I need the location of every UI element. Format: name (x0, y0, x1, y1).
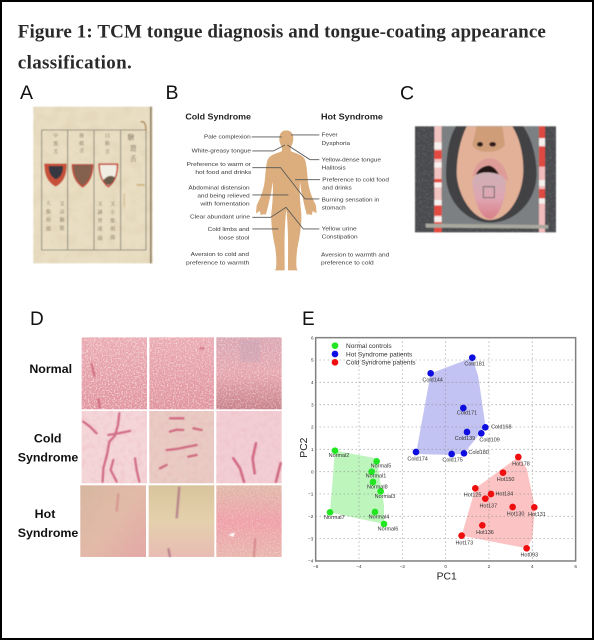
bottom ruler (426, 224, 548, 229)
hot point labels: Hot125 (464, 492, 481, 498)
cold points (413, 354, 489, 457)
title: Figure 1: TCM tongue diagnosis and tongue-coating appearance (18, 21, 546, 42)
y axis tick labels: −3 (308, 536, 314, 541)
panel label B: B (166, 82, 179, 104)
face (457, 126, 523, 220)
vertical caption characters: 柴 (110, 217, 115, 224)
hot point labels: Hot130 (507, 512, 524, 518)
cold point labels: Cold144 (422, 377, 443, 383)
vertical caption characters: 中 (53, 132, 58, 139)
vertical caption characters: 瘟 (79, 140, 84, 147)
legend: Cold Syndrome patients (346, 360, 416, 367)
vertical caption characters: 湯 (97, 235, 102, 242)
leader lines (252, 135, 320, 229)
hot syndrome symptoms (321, 133, 389, 267)
vertical caption characters: 又 (60, 202, 65, 208)
vertical caption characters: 胃 (97, 217, 102, 224)
vertical caption characters: 湯 (110, 234, 115, 241)
hot syndrome symptoms: Halitosis (322, 165, 346, 171)
row label: Cold Syndrome: Syndrome (18, 451, 78, 465)
y axis title: PC2 (299, 437, 310, 458)
cold point labels: Cold171 (457, 411, 477, 417)
legend: Normal controls (346, 343, 392, 350)
hot syndrome symptoms: stomach (322, 205, 346, 211)
normal cluster hull (330, 451, 384, 524)
cold point labels: Cold174 (407, 456, 428, 462)
cold point labels: Cold180 (468, 450, 489, 456)
row label: Hot Syndrome: Syndrome (18, 526, 78, 540)
panel label D: D (30, 309, 44, 330)
panel label E: E (302, 309, 315, 330)
hot point labels: Hot150 (497, 477, 514, 483)
y axis tick labels: 2 (311, 425, 314, 430)
tongue drawing: brown coating (72, 164, 93, 188)
cold syndrome symptoms: loose stool (219, 235, 249, 241)
panel D: tongue coating micrographs (18, 309, 282, 557)
tongue drawing: black coating (44, 164, 67, 187)
x axis tick labels: 6 (574, 564, 577, 569)
cold point labels (407, 361, 512, 463)
vertical caption characters: 又 (110, 202, 115, 208)
nose (472, 126, 505, 152)
vertical caption characters: 白 (105, 132, 110, 139)
hot syndrome symptoms: Preference to cold food (322, 178, 389, 184)
row label: Hot Syndrome (18, 507, 78, 540)
normal point labels: Normal5 (371, 464, 391, 470)
hot syndrome symptoms: Burning sensation in (322, 197, 379, 203)
left ruler (434, 126, 442, 232)
hot syndrome symptoms: and drinks (322, 186, 352, 192)
x axis tick labels: 0 (444, 564, 447, 569)
human body silhouette (256, 130, 317, 270)
vertical caption characters: 柴 (46, 208, 51, 215)
vertical caption characters: 涼 (60, 208, 66, 215)
head rest frame (446, 126, 537, 223)
row label: Hot Syndrome: Hot (35, 507, 55, 521)
lips and mouth (473, 158, 508, 182)
x axis tick labels: −2 (400, 564, 405, 569)
micrograph grid (80, 337, 282, 557)
x axis tick labels (313, 564, 577, 569)
vertical caption characters: 驗 (127, 132, 135, 141)
cold syndrome symptoms: Aversion to cold and (191, 252, 249, 258)
vertical caption characters: 大 (46, 200, 51, 207)
y axis tick labels: 0 (311, 469, 314, 474)
row label: Normal: Normal (29, 362, 72, 376)
hot point labels: Hot136 (476, 530, 494, 536)
vertical caption characters: 胡 (46, 217, 51, 224)
right ruler (539, 126, 545, 232)
legend: Hot Syndrome patients (346, 351, 413, 358)
normal point labels: Normal2 (329, 453, 349, 459)
cold syndrome symptoms: hot food and drinks (195, 170, 252, 176)
cold syndrome symptoms: Preference to warm or (187, 162, 251, 168)
x axis tick labels: −4 (356, 564, 362, 569)
panel B: cold and hot syndrome body chart (166, 82, 389, 270)
y axis tick labels: 5 (311, 358, 314, 363)
x axis tick labels: 4 (531, 564, 534, 569)
hot points (458, 454, 538, 552)
vertical caption characters: 胎 (105, 140, 111, 147)
hot point labels: Hot131 (528, 512, 546, 518)
hot syndrome symptoms: Yellow urine (322, 227, 357, 233)
title (18, 21, 546, 73)
panel E: PCA scatter plot (299, 309, 577, 582)
cold point labels: Cold139 (455, 436, 475, 442)
heading: Cold Syndrome: Cold Syndrome (185, 111, 251, 121)
vertical caption characters: 湯 (46, 226, 51, 233)
normal point labels (324, 453, 398, 532)
vertical caption characters (46, 132, 137, 242)
hot syndrome row (80, 485, 282, 557)
cold point labels: Cold175 (442, 457, 463, 463)
face and tongue photo (415, 126, 556, 232)
normal point labels: Normal6 (378, 526, 398, 532)
cold point labels: Cold109 (479, 437, 500, 443)
tongue drawing: white coating (98, 163, 118, 188)
cold syndrome symptoms: Pale complexion (204, 135, 251, 141)
vertical caption characters: 黑 (53, 141, 58, 148)
hot point labels: Hot137 (479, 503, 497, 509)
normal point labels: Normal4 (369, 514, 389, 520)
plot frame (316, 338, 576, 561)
row label: Cold Syndrome (18, 432, 78, 465)
y axis tick labels: 3 (311, 402, 314, 407)
vertical caption characters: 膈 (60, 217, 65, 224)
cold syndrome symptoms: Abdominal distension (188, 185, 250, 191)
panel label C: C (400, 82, 414, 104)
hot syndrome symptoms: Constipation (322, 235, 358, 241)
normal row (82, 337, 282, 409)
hot point labels: Hot173 (455, 540, 473, 546)
cold syndrome symptoms: and being relieved (197, 193, 250, 199)
y axis tick labels: −1 (308, 492, 314, 497)
normal points (327, 447, 387, 527)
vertical caption characters: 将 (79, 132, 84, 139)
cold syndrome symptoms: Clear abundant urine (190, 214, 250, 220)
x axis title: PC1 (437, 571, 457, 582)
vertical caption characters: 成 (97, 226, 102, 233)
normal point labels: Normal7 (324, 515, 345, 521)
vertical caption characters: 舌 (105, 148, 110, 155)
title: classification. (18, 52, 132, 73)
hot point labels (455, 462, 546, 559)
hot syndrome symptoms: Dysphoria (322, 141, 351, 147)
normal point labels: Normal1 (366, 474, 386, 480)
hot syndrome symptoms: preference to cold (321, 261, 374, 267)
heading: Hot Syndrome: Hot Syndrome (321, 111, 383, 121)
cold syndrome symptoms: White-greasy tongue (192, 149, 251, 155)
y axis tick labels: 6 (311, 335, 314, 340)
legend (332, 342, 416, 367)
cold cluster hull (416, 358, 486, 455)
grid lines (316, 338, 576, 561)
hot syndrome symptoms: Aversion to warmth and (321, 252, 389, 258)
y axis tick labels: 1 (311, 447, 314, 452)
y axis tick labels: −4 (308, 559, 314, 564)
hot point labels: Hot178 (512, 462, 530, 468)
hot point labels: Hot093 (520, 553, 538, 559)
panel label A: A (20, 82, 33, 104)
panel C: tongue image capture photo (400, 82, 556, 232)
vertical caption characters: 小 (110, 209, 116, 216)
sampling square (483, 187, 494, 198)
vertical caption characters: 證 (130, 144, 137, 153)
vertical caption characters: 舌 (53, 148, 58, 155)
vertical caption characters: 散 (60, 225, 65, 232)
vertical caption characters: 調 (97, 209, 102, 216)
panel A: classical tongue diagnosis book page (20, 82, 153, 263)
book page illustration (33, 107, 153, 263)
y axis tick labels (308, 335, 314, 564)
hot point labels: Hot134 (495, 492, 513, 498)
cold point labels: Cold181 (464, 361, 485, 367)
cold syndrome row (82, 411, 282, 483)
hot syndrome symptoms: Yellow-dense tongue (322, 157, 381, 163)
cold syndrome symptoms: preference to warmth (186, 260, 249, 266)
vertical caption characters: 又 (97, 202, 102, 208)
tongue (472, 172, 506, 219)
y axis tick labels: 4 (311, 380, 314, 385)
vertical caption characters: 舌 (130, 154, 137, 163)
cold syndrome symptoms: with fomentation (199, 202, 250, 208)
cold syndrome symptoms: Cold limbs and (208, 227, 249, 233)
row label: Cold Syndrome: Cold (34, 432, 61, 446)
cold syndrome symptoms (186, 135, 252, 266)
hot syndrome symptoms: Fever (322, 133, 338, 139)
x axis tick labels: −6 (313, 564, 319, 569)
vertical caption characters: 舌 (79, 148, 84, 155)
cold point labels: Cold168 (491, 425, 512, 431)
normal point labels: Normal8 (367, 484, 388, 490)
normal point labels: Normal3 (375, 494, 395, 500)
hot cluster hull (462, 457, 535, 548)
y axis tick labels: −2 (308, 514, 314, 519)
vertical caption characters: 胡 (110, 226, 115, 233)
x axis tick labels: 2 (488, 564, 491, 569)
